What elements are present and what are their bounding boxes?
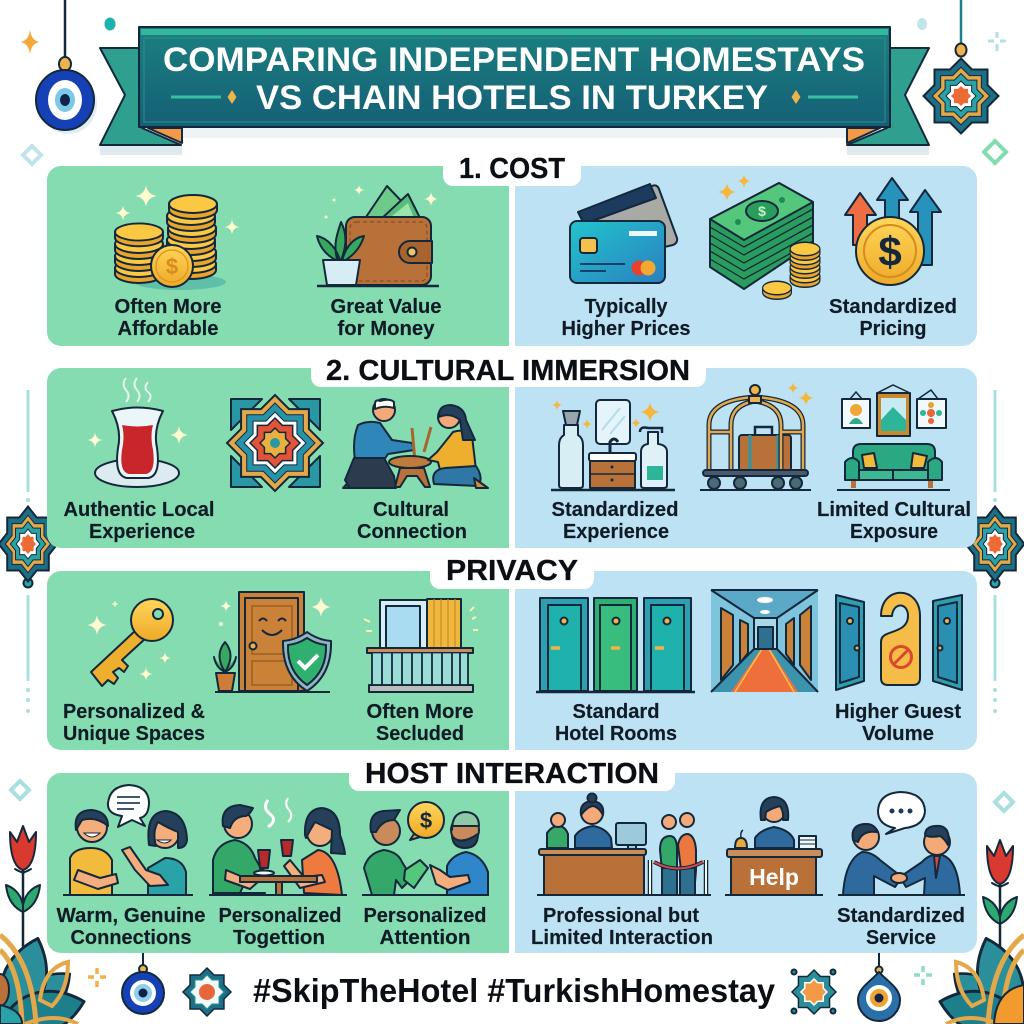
label: Affordable bbox=[118, 318, 218, 340]
icon: toiletries and vanity bbox=[551, 400, 675, 490]
ribbon folds bbox=[148, 128, 880, 143]
decoration: bottom evil eye bbox=[122, 953, 164, 1014]
label: Personalized & bbox=[63, 701, 205, 723]
decoration: left tulip bbox=[6, 781, 40, 950]
icon: help desk: Help bbox=[749, 864, 799, 890]
icon: dollar coin with rising arrows: $ bbox=[878, 228, 902, 275]
decoration: bottom drop eye charm bbox=[858, 953, 900, 1021]
decoration: scattered top sparkles and diamonds bbox=[20, 18, 1006, 164]
label bbox=[364, 905, 486, 949]
title flourishes bbox=[171, 90, 858, 104]
decoration: bottom right sparkle bbox=[914, 966, 932, 985]
ribbon tail right bbox=[847, 48, 929, 145]
icon: cash stack with coins bbox=[710, 174, 820, 299]
label: Authentic Local bbox=[64, 499, 215, 521]
label: Higher Guest bbox=[835, 701, 961, 723]
panel: privacy homestays bbox=[47, 571, 509, 750]
label: Experience bbox=[89, 521, 195, 543]
icon: turkish tea glass bbox=[88, 378, 188, 487]
icon: hotel corridor bbox=[711, 590, 818, 692]
decoration: right side rail and ornament bbox=[966, 390, 1024, 713]
panel: cultural immersion chain hotels bbox=[515, 368, 977, 548]
icon: geometric tile pattern bbox=[227, 395, 323, 491]
icon: dollar coin with rising arrows bbox=[845, 178, 941, 285]
banner body bbox=[139, 27, 890, 127]
decoration: bottom left corner flower bbox=[0, 932, 89, 1024]
title text: COMPARING INDEPENDENT HOMESTAYS bbox=[163, 41, 865, 79]
icon: row of hotel doors bbox=[536, 598, 695, 692]
label bbox=[817, 499, 971, 543]
icon: sharing tea at a table bbox=[209, 798, 347, 895]
label: Service bbox=[866, 927, 936, 949]
panel: cost homestays bbox=[47, 166, 509, 346]
icon: host giving personal attention bbox=[362, 802, 489, 895]
label: Connection bbox=[357, 521, 467, 543]
label: Personalized bbox=[218, 905, 342, 927]
decoration: bottom left sparkle bbox=[88, 968, 106, 987]
heading: cultural immersion: 2. CULTURAL IMMERSION bbox=[326, 355, 690, 387]
title text: VS CHAIN HOTELS IN TURKEY bbox=[256, 79, 768, 117]
decoration: bottom right star medallion bbox=[792, 970, 836, 1014]
label: Often More bbox=[114, 296, 222, 318]
icon: wall frames and sofa bbox=[837, 385, 950, 490]
label bbox=[63, 701, 205, 745]
panel: cultural immersion homestays bbox=[47, 368, 509, 548]
label bbox=[357, 499, 467, 543]
label: for Money bbox=[338, 318, 435, 340]
label: Typically bbox=[584, 296, 668, 318]
icon: two people doing a craft bbox=[343, 399, 488, 488]
label: Great Value bbox=[330, 296, 442, 318]
icon: cash stack with coins: $ bbox=[758, 203, 766, 219]
label: Togettion bbox=[233, 927, 325, 949]
panel: host interaction homestays bbox=[47, 773, 509, 953]
label bbox=[552, 499, 678, 543]
label bbox=[330, 296, 442, 340]
label: Standardized bbox=[552, 499, 678, 521]
label bbox=[555, 701, 677, 745]
label: Exposure bbox=[850, 521, 938, 543]
label: Connections bbox=[70, 927, 192, 949]
label bbox=[366, 701, 474, 745]
icon: balcony with curtain bbox=[364, 599, 478, 692]
label bbox=[218, 905, 342, 949]
label: Limited Cultural bbox=[817, 499, 971, 521]
heading: host interaction: HOST INTERACTION bbox=[365, 758, 659, 790]
label: Cultural bbox=[373, 499, 449, 521]
label bbox=[56, 905, 206, 949]
label: Standard bbox=[572, 701, 660, 723]
label: Higher Prices bbox=[562, 318, 690, 340]
icon: warm conversation bbox=[63, 785, 193, 895]
diamond bbox=[995, 793, 1013, 811]
label bbox=[835, 701, 961, 745]
label: Unique Spaces bbox=[63, 723, 205, 745]
title text bbox=[163, 41, 865, 117]
icon: business handshake bbox=[838, 792, 965, 895]
decoration: left side rail and ornament bbox=[0, 390, 57, 713]
icon: doors with do-not-disturb hanger bbox=[836, 593, 962, 690]
label: Secluded bbox=[376, 723, 464, 745]
label: Pricing bbox=[860, 318, 926, 340]
label bbox=[531, 905, 713, 949]
icon: host giving personal attention: $ bbox=[420, 808, 432, 833]
decoration: right tulip bbox=[983, 793, 1017, 955]
ribbon tail left bbox=[100, 48, 181, 145]
icon: golden key bbox=[87, 599, 173, 686]
label: Limited Interaction bbox=[531, 927, 713, 949]
label bbox=[829, 296, 957, 340]
decoration: bottom right corner flower bbox=[935, 932, 1024, 1024]
label bbox=[64, 499, 215, 543]
label: Warm, Genuine bbox=[56, 905, 206, 927]
icon: credit cards bbox=[570, 184, 677, 283]
hashtags: #SkipTheHotel #TurkishHomestay bbox=[253, 972, 776, 1009]
icon: luggage cart bbox=[700, 382, 814, 490]
label: Experience bbox=[563, 521, 669, 543]
diamond bbox=[11, 781, 29, 799]
label bbox=[837, 905, 965, 949]
title banner bbox=[100, 27, 929, 155]
label: Personalized bbox=[364, 905, 486, 927]
label: Often More bbox=[366, 701, 474, 723]
label: Hotel Rooms bbox=[555, 723, 677, 745]
label: Professional but bbox=[543, 905, 699, 927]
decoration: bottom star medallion bbox=[183, 968, 231, 1016]
panel: cost chain hotels bbox=[515, 166, 977, 346]
decoration: top right star ornament bbox=[924, 0, 998, 134]
icon: wallet with plant bbox=[317, 185, 439, 286]
decoration: top left evil eye charm bbox=[36, 0, 97, 134]
label: Standardized bbox=[837, 905, 965, 927]
heading: privacy: PRIVACY bbox=[446, 555, 578, 587]
label bbox=[562, 296, 690, 340]
icon: coin stacks: $ bbox=[166, 254, 178, 279]
heading: cost: 1. COST bbox=[459, 153, 565, 185]
icon: smiling door with shield bbox=[214, 592, 331, 692]
panel: privacy chain hotels bbox=[515, 571, 977, 750]
label bbox=[114, 296, 222, 340]
panel: host interaction chain hotels bbox=[515, 773, 977, 953]
label: Volume bbox=[862, 723, 934, 745]
label: Attention bbox=[380, 927, 470, 949]
icon: coin stacks bbox=[115, 185, 240, 290]
icon: help desk bbox=[725, 797, 823, 895]
label: Standardized bbox=[829, 296, 957, 318]
icon: reception desk with guests bbox=[537, 794, 711, 895]
